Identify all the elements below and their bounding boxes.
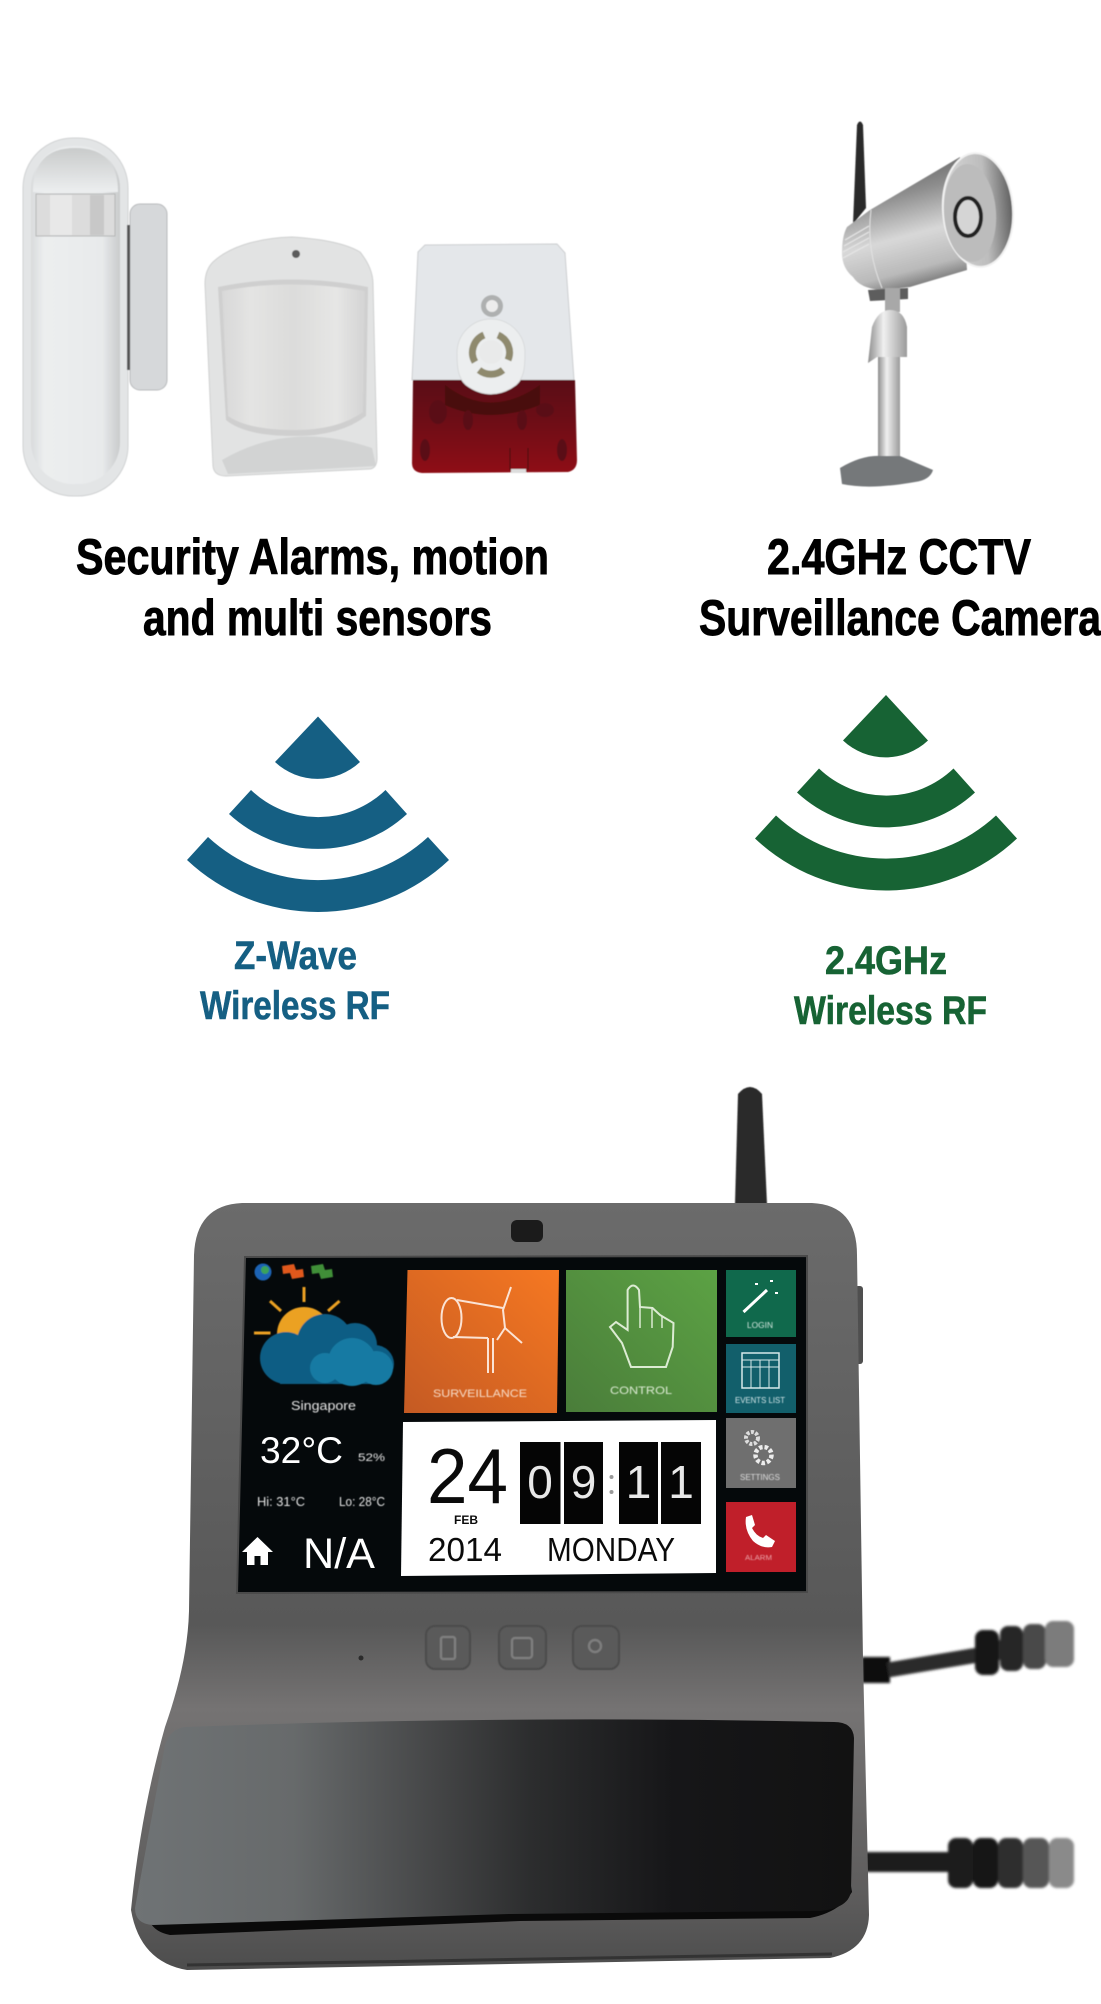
- surveillance tile: SURVEILLANCE: [433, 1388, 527, 1400]
- settings tile: [726, 1418, 796, 1488]
- clock panel: FEB: [454, 1513, 478, 1527]
- events list tile: [726, 1344, 796, 1413]
- login tile: [726, 1270, 796, 1337]
- events list tile: EVENTS LIST: [735, 1396, 785, 1405]
- clock panel: 2014: [428, 1531, 502, 1568]
- icon: 2.4GHz signal: [755, 695, 1017, 891]
- camera notch: [511, 1220, 543, 1242]
- icon: PIR motion sensor: [205, 237, 377, 476]
- clock panel: 1: [668, 1456, 694, 1508]
- icon: siren alarm: [412, 244, 577, 473]
- control tile: CONTROL: [610, 1385, 672, 1397]
- label: 2.4GHz wireless RF: [794, 939, 987, 1033]
- label: 2.4GHz wireless RF: Wireless RF: [794, 989, 987, 1033]
- upper coiled cable: [862, 1621, 1074, 1683]
- label: Z-Wave wireless RF: Wireless RF: [200, 984, 390, 1028]
- device body: [131, 1203, 869, 1970]
- alarm tile: ALARM: [745, 1555, 772, 1562]
- heading: security alarms: [76, 529, 549, 646]
- settings tile: SETTINGS: [740, 1473, 780, 1482]
- heading: CCTV camera: [699, 529, 1101, 646]
- weather readings: 52%: [358, 1452, 385, 1464]
- hardware buttons: [426, 1626, 619, 1669]
- weather readings: N/A: [303, 1530, 375, 1578]
- heading: CCTV camera: 2.4GHz CCTV: [767, 529, 1032, 585]
- surveillance tile: [404, 1270, 559, 1413]
- heading: security alarms: Security Alarms, motion: [76, 529, 549, 585]
- weather readings: Lo: 28°C: [339, 1494, 385, 1509]
- tray shadow gap: [150, 1880, 852, 1935]
- status icons: [254, 1264, 333, 1280]
- icon: door and window multi sensor: [23, 138, 167, 496]
- clock panel: 0: [527, 1456, 553, 1508]
- label: 2.4GHz wireless RF: 2.4GHz: [825, 939, 947, 983]
- login tile: LOGIN: [747, 1321, 773, 1330]
- weather readings: Hi: 31°C: [257, 1494, 305, 1509]
- control tile: [566, 1270, 717, 1412]
- clock panel: [401, 1420, 716, 1576]
- icon: CCTV camera: [840, 122, 1017, 487]
- clock panel: 1: [626, 1456, 651, 1508]
- bottom edge line: [187, 1954, 832, 1965]
- icon: control panel device: [131, 1087, 1074, 1970]
- screen: [237, 1256, 807, 1593]
- tray pad: [135, 1719, 854, 1925]
- heading: security alarms: and multi sensors: [143, 590, 492, 646]
- clock panel: 9: [571, 1456, 596, 1508]
- side button: [855, 1286, 863, 1364]
- alarm tile: [726, 1502, 796, 1572]
- lower coiled cable: [855, 1838, 1074, 1888]
- weather icon: [254, 1287, 394, 1386]
- antenna: [735, 1087, 767, 1204]
- icon: Z-Wave signal: [187, 716, 449, 912]
- weather readings: 32°C: [260, 1430, 343, 1471]
- clock panel: MONDAY: [547, 1531, 675, 1568]
- weather readings: [257, 1398, 385, 1578]
- weather readings: Singapore: [291, 1398, 356, 1413]
- label: Z-Wave wireless RF: Z-Wave: [234, 934, 357, 978]
- label: Z-Wave wireless RF: [200, 934, 390, 1028]
- clock panel: 24: [427, 1432, 508, 1520]
- home icon: [242, 1537, 273, 1565]
